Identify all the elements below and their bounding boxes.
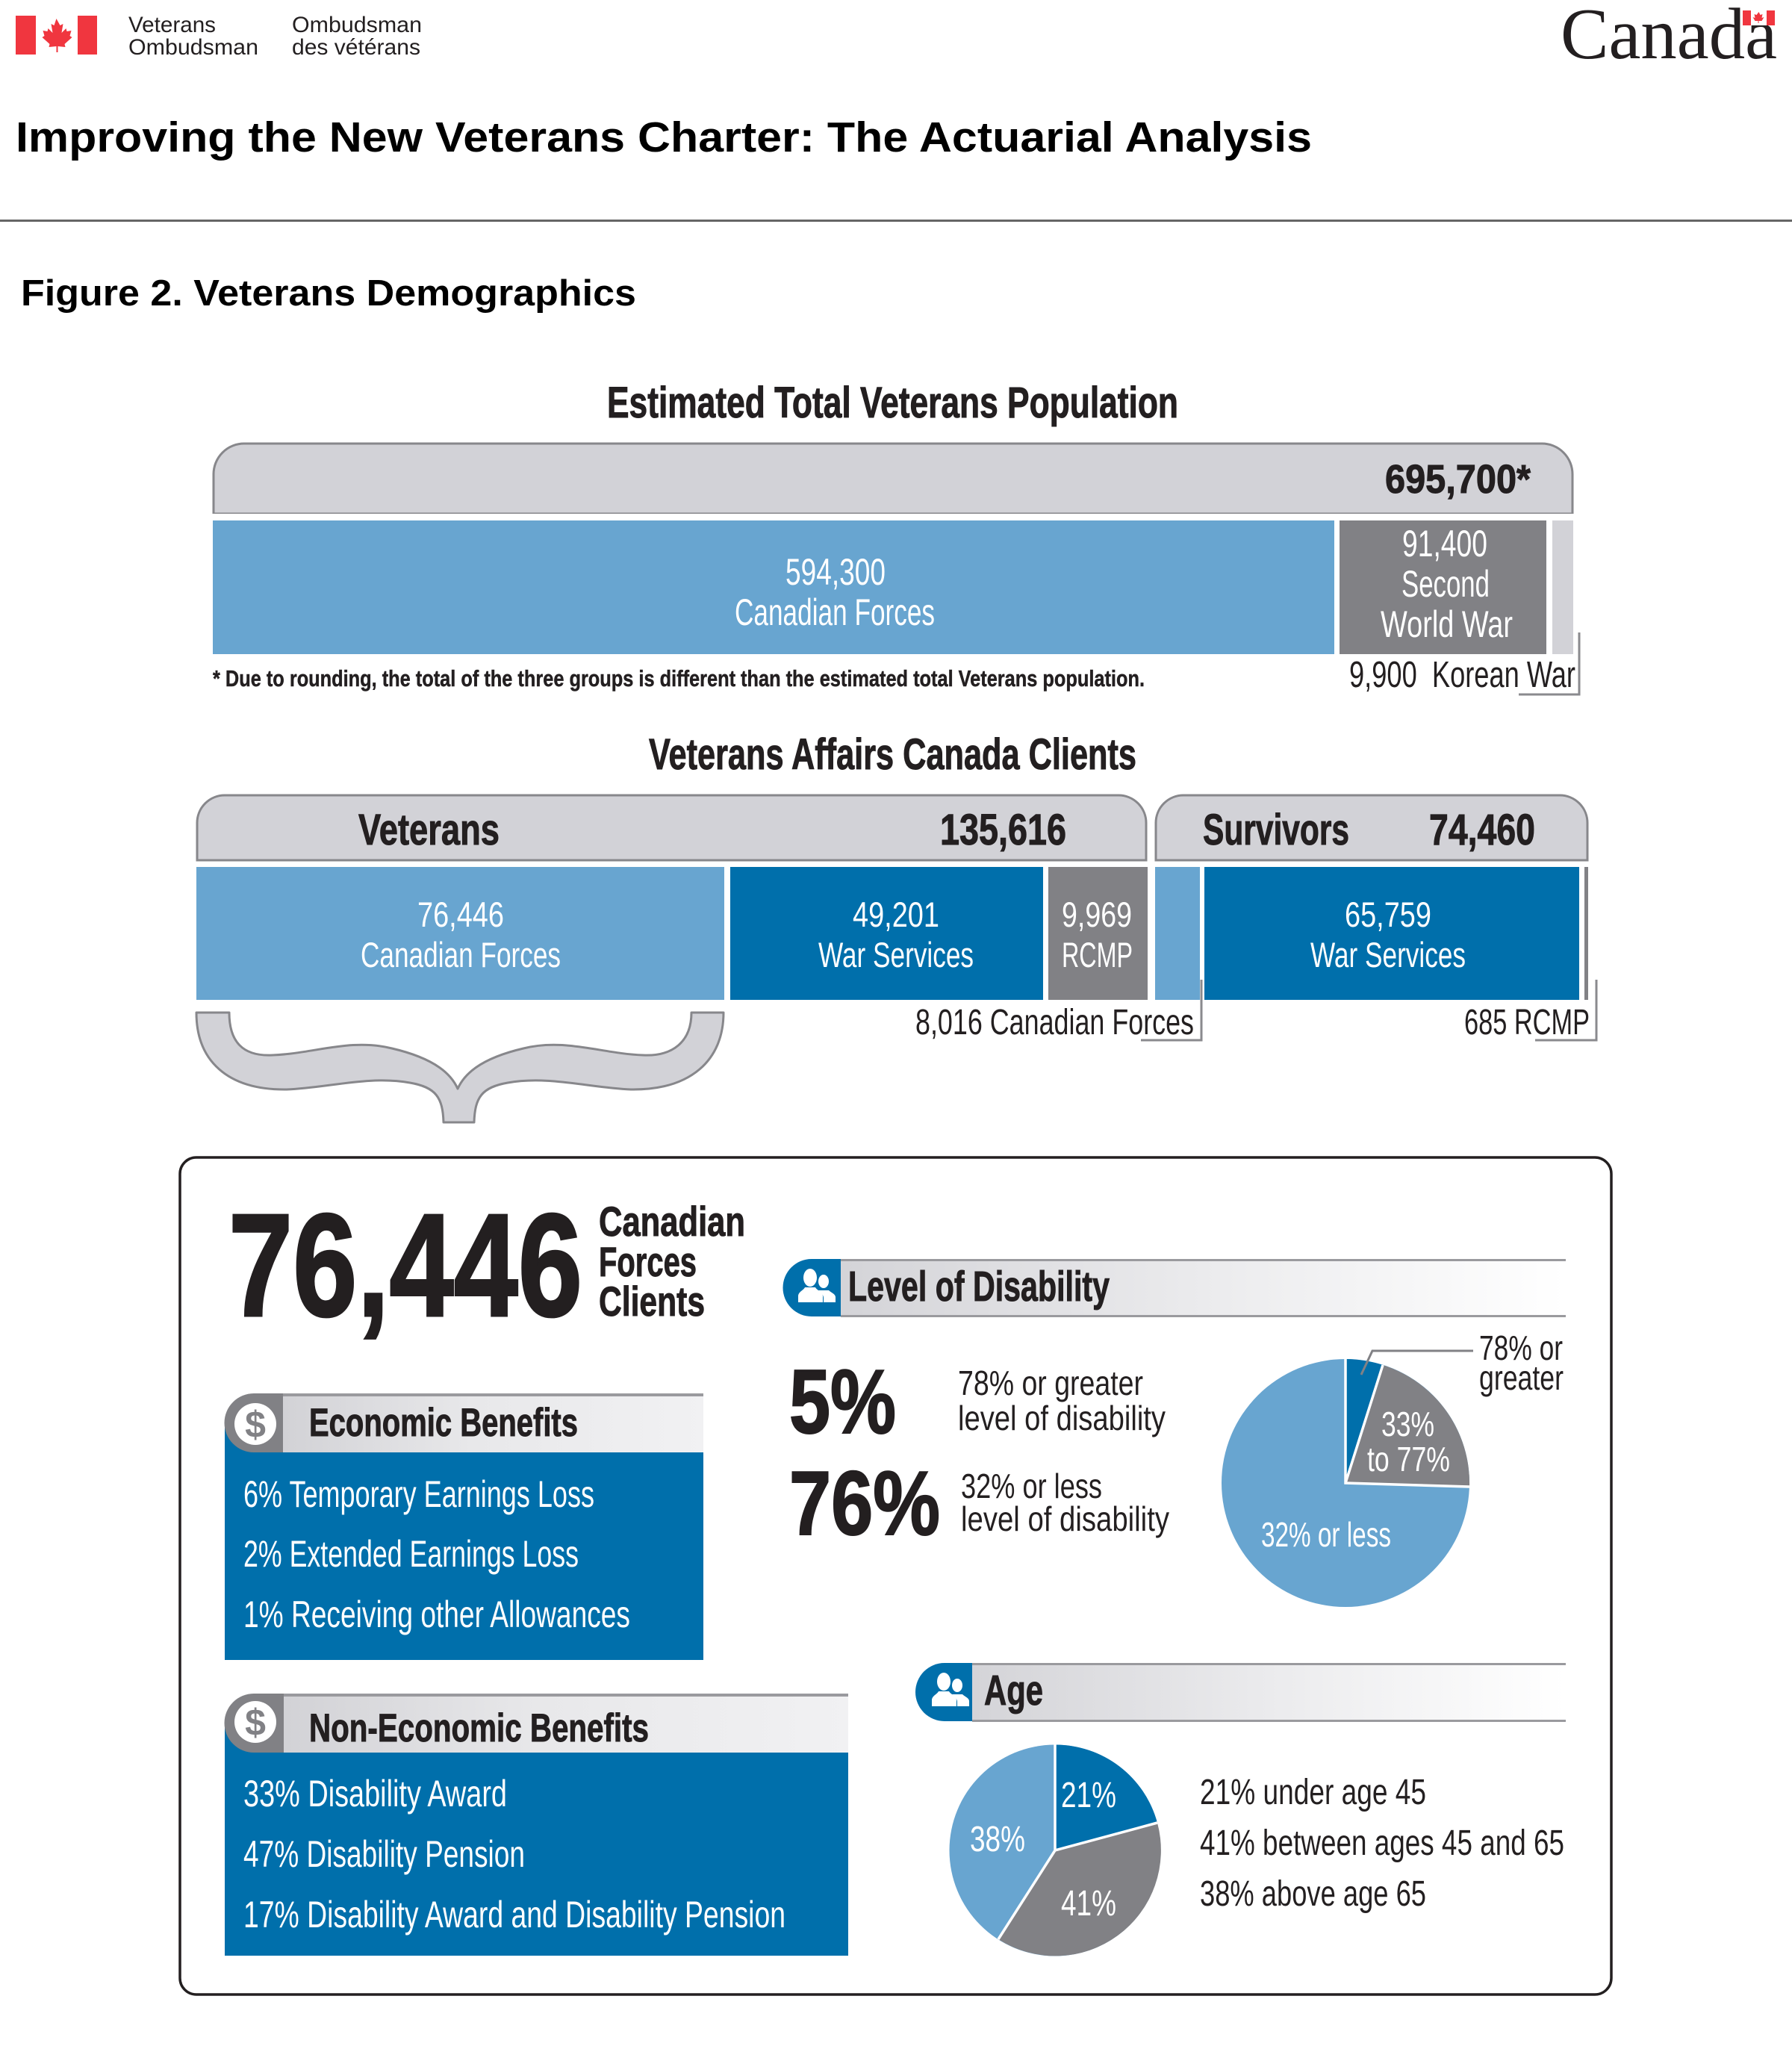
bar segment: Second World War 91,400: Second: [1401, 563, 1490, 605]
statistic: 76%: level of disability: [961, 1499, 1169, 1538]
callout: Survivors Canadian Forces 8,016: [915, 980, 1201, 1042]
list: age breakdown: 41% between ages 45 and 65: [1200, 1824, 1564, 1863]
logo text: English: Ombudsman: [128, 35, 258, 60]
big number: 76,446 Canadian Forces Clients: Canadian: [599, 1198, 745, 1245]
panel: Economic Benefits: [225, 1393, 703, 1660]
header: Level of Disability: Level of Disability: [848, 1263, 1110, 1311]
pie chart: age: [950, 1744, 1161, 1956]
bar segment: Survivors Canadian Forces: [1155, 867, 1200, 1000]
list: non-economic benefit percentages: [243, 1773, 785, 1936]
header: Age: [915, 1663, 1566, 1722]
pie chart: age: 41%: [1061, 1884, 1116, 1924]
section: Level of Disability: [783, 1259, 1566, 1607]
statistic: 76%: 76%: [789, 1452, 940, 1554]
header: Age: Age: [984, 1667, 1043, 1714]
bar segment: Veterans RCMP 9,969: RCMP: [1062, 935, 1133, 974]
list: non-economic benefit percentages: 47% Disability Pension: [243, 1833, 525, 1875]
heading: estimated total veterans population: Estimated Total Veterans Population: [607, 379, 1178, 427]
bar segment: Canadian Forces 594,300: 594,300: [785, 551, 886, 593]
bar segment: Veterans Canadian Forces 76,446: 76,446: [417, 895, 504, 934]
bar segment: Survivors War Services 65,759: War Services: [1310, 935, 1466, 974]
header bar: Survivors 74,460: 74,460: [1429, 806, 1535, 854]
title: Improving the New Veterans Charter: The Actuarial Analysis: [16, 114, 1312, 161]
icon: dollar badge: $: [245, 1404, 266, 1446]
panel: estimated total veterans population: [209, 379, 1579, 695]
pie chart: level of disability: [1222, 1359, 1469, 1607]
header bar: total 695,700: [209, 444, 1579, 517]
logo text: English: [128, 13, 258, 60]
bar segment: Veterans Canadian Forces 76,446: Canadian Forces: [361, 935, 561, 974]
logo text: French: des vétérans: [292, 35, 420, 60]
heading: Veterans Affairs Canada clients: Veterans Affairs Canada Clients: [649, 730, 1136, 779]
list: economic benefit percentages: 2% Extended Earnings Loss: [243, 1533, 579, 1575]
icon: dollar badge: $: [245, 1702, 266, 1744]
callout: 78% or greater: greater: [1479, 1358, 1564, 1397]
logo text: French: [292, 13, 422, 60]
icon: people: [798, 1269, 836, 1302]
statistic: 5%: [789, 1351, 1166, 1452]
header bar: Survivors 74,460: [1156, 795, 1587, 860]
list: age breakdown: 38% above age 65: [1200, 1874, 1426, 1914]
callout: 78% or greater: 78% or: [1479, 1328, 1563, 1367]
list: age breakdown: [1200, 1773, 1564, 1914]
section: Age: [915, 1663, 1566, 1956]
pie chart: level of disability: to 77%: [1367, 1440, 1450, 1479]
big number: 76,446 Canadian Forces Clients: Forces: [599, 1238, 697, 1285]
statistic: 76%: 32% or less: [961, 1467, 1102, 1505]
bar segment: Survivors War Services 65,759: [1204, 867, 1579, 1000]
panel: Canadian Forces clients detail: [180, 1157, 1611, 1995]
header bar: Veterans 135,616: Veterans: [358, 806, 500, 854]
list: economic benefit percentages: [243, 1473, 630, 1635]
header bar: total 695,700: 695,700*: [1385, 457, 1531, 502]
callout: Survivors RCMP 685: 685 RCMP: [1464, 1003, 1590, 1042]
callout: Korean War 9,900: [1349, 632, 1579, 695]
list: non-economic benefit percentages: 17% Disability Award and Disability Pension: [243, 1894, 785, 1936]
header bar: Veterans 135,616: [197, 795, 1146, 860]
bar segment: Canadian Forces 594,300: Canadian Forces: [735, 591, 935, 633]
logo text: French: Ombudsman: [292, 13, 422, 37]
bar segment: Veterans RCMP 9,969: [1048, 867, 1148, 1000]
bar segment: Second World War 91,400: 91,400: [1402, 523, 1487, 565]
callout: Survivors RCMP 685: [1464, 980, 1596, 1042]
callout: Korean War 9,900: 9,900 Korean War: [1349, 655, 1575, 695]
heading: Non-Economic Benefits: Non-Economic Benefits: [309, 1706, 649, 1750]
big number: 76,446 Canadian Forces Clients: 76,446: [228, 1184, 582, 1347]
statistic: 5%: 5%: [789, 1351, 896, 1452]
panel: Non-Economic Benefits: [225, 1694, 848, 1956]
footnote: * Due to rounding, the total of the three groups is different than the estimated total Veterans population.: [213, 665, 1145, 691]
bar segment: Korean War: [1552, 520, 1573, 654]
statistic: 5%: 78% or greater: [958, 1364, 1143, 1402]
icon: dollar badge: [225, 1393, 283, 1452]
bar segment: Veterans War Services 49,201: [730, 867, 1043, 1000]
header bar: Veterans 135,616: 135,616: [940, 806, 1066, 854]
callout: 78% or greater: [1361, 1328, 1564, 1397]
big number: 76,446 Canadian Forces Clients: Clients: [599, 1278, 705, 1325]
icon: Canadian flag: [16, 16, 97, 55]
pie chart: age: 38%: [970, 1820, 1025, 1859]
statistic: 5%: level of disability: [958, 1399, 1166, 1437]
bar segment: Canadian Forces 594,300: [213, 520, 1334, 654]
statistic: 76%: [789, 1452, 1169, 1554]
pie chart: level of disability: 33%: [1381, 1405, 1434, 1443]
bar segment: Survivors War Services 65,759: 65,759: [1345, 895, 1431, 934]
logo: Veterans Ombudsman flag and wordmark: [16, 13, 422, 60]
bar segment: Veterans War Services 49,201: War Services: [818, 935, 974, 974]
icon: people: [932, 1673, 969, 1706]
list: economic benefit percentages: 1% Receiving other Allowances: [243, 1594, 630, 1635]
bar segment: Veterans RCMP 9,969: 9,969: [1062, 895, 1132, 934]
brace connecting Canadian Forces to detail panel: [196, 1013, 724, 1122]
bar segment: Veterans War Services 49,201: 49,201: [853, 895, 939, 934]
pie chart: level of disability: 32% or less: [1261, 1515, 1391, 1554]
header: Level of Disability: [783, 1259, 1566, 1317]
list: non-economic benefit percentages: 33% Disability Award: [243, 1773, 507, 1815]
panel: Veterans Affairs Canada clients: [196, 730, 1596, 1122]
heading: Economic Benefits: Economic Benefits: [309, 1401, 578, 1445]
list: age breakdown: 21% under age 45: [1200, 1773, 1426, 1812]
logo text: English: Veterans: [128, 13, 216, 37]
bar segment: Veterans Canadian Forces 76,446: [196, 867, 724, 1000]
callout: Survivors Canadian Forces 8,016: 8,016 Canadian Forces: [915, 1003, 1194, 1042]
bar segment: Second World War 91,400: World War: [1381, 603, 1513, 645]
icon: dollar badge: [225, 1694, 284, 1753]
list: economic benefit percentages: 6% Temporary Earnings Loss: [243, 1473, 594, 1515]
bar segment: Survivors RCMP: [1584, 867, 1588, 1000]
header bar: Survivors 74,460: Survivors: [1203, 806, 1349, 854]
bar segment: Second World War 91,400: [1340, 520, 1546, 654]
figure heading: Figure 2. Veterans Demographics: [21, 273, 636, 314]
icon: wordmark flag: [1743, 10, 1775, 25]
pie chart: age: 21%: [1061, 1776, 1116, 1815]
